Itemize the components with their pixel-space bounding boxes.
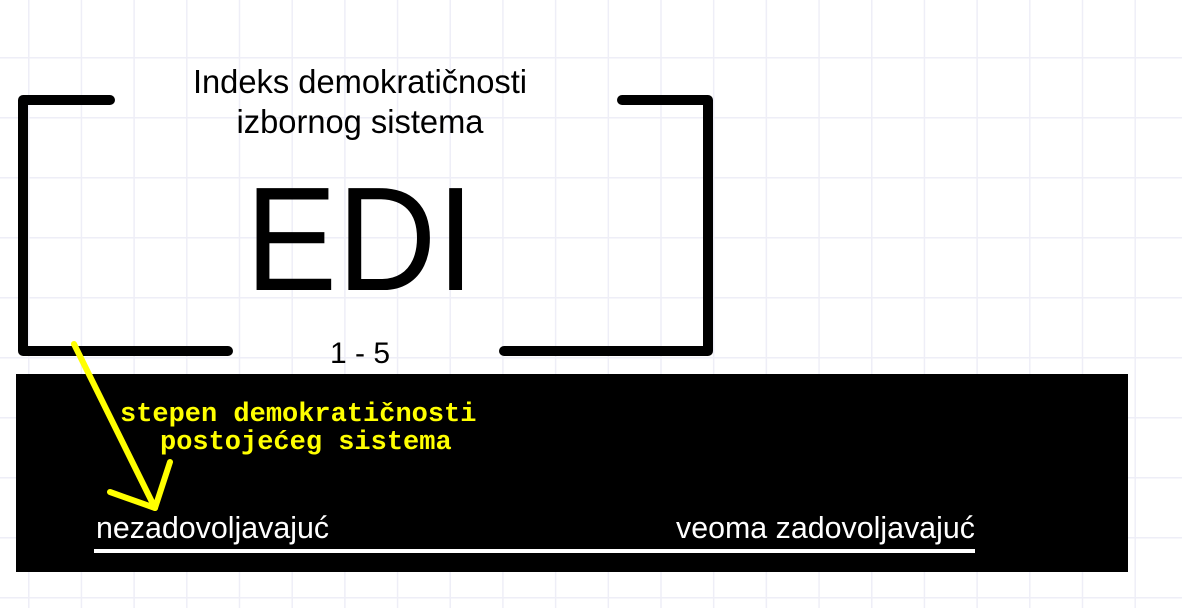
scale line [94,549,975,553]
EDI heading: EDI [245,157,475,322]
title: izbornog sistema [237,103,483,140]
title: Indeks demokratičnosti [193,63,527,100]
scale range: 1 - 5 [330,337,390,370]
right bracket [504,100,708,351]
callout text: stepen demokratičnosti [120,400,476,430]
panel: scale [16,374,1128,572]
label: high: veoma zadovoljavajuć [676,510,975,545]
callout text: postojećeg sistema [160,428,452,458]
left bracket [23,100,228,351]
callout text [120,400,476,458]
label: low: nezadovoljavajuć [96,510,329,545]
title [193,63,527,140]
